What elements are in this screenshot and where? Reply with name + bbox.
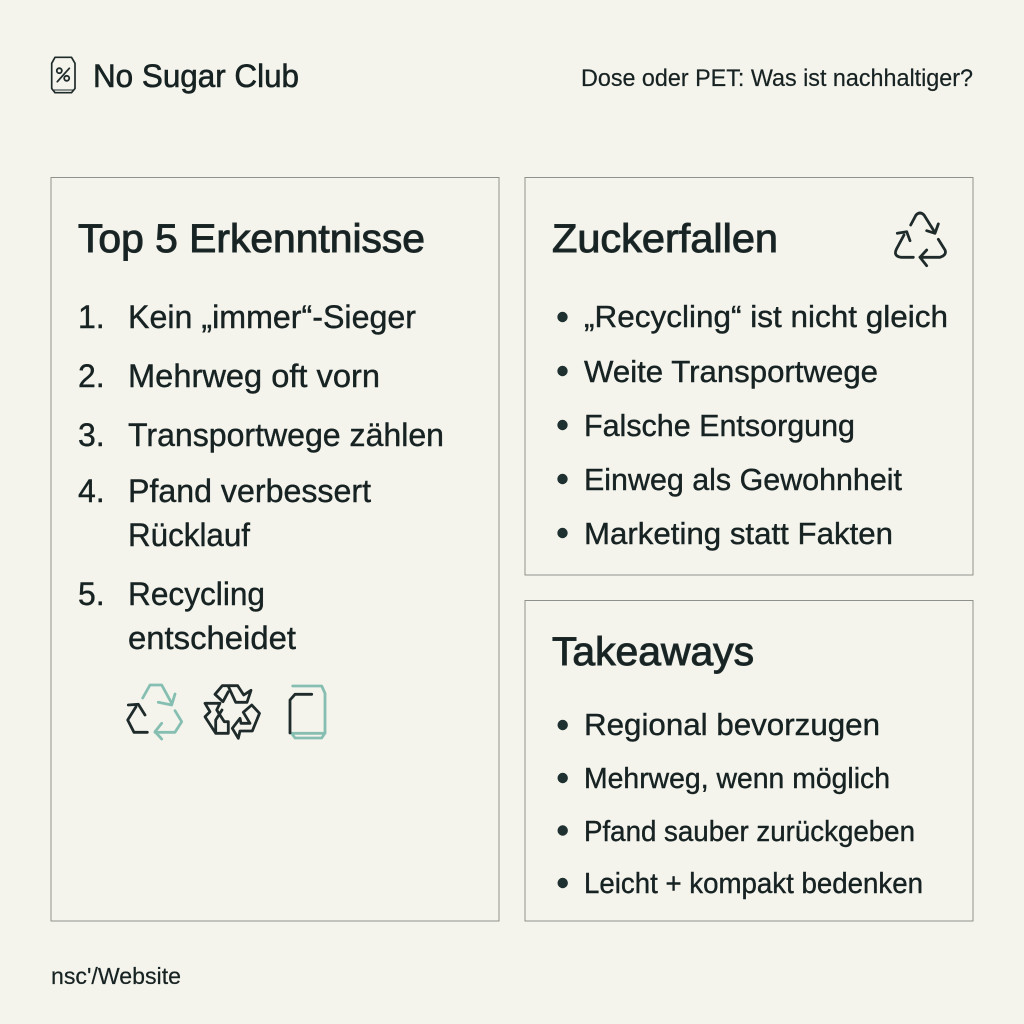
bullet list: „Recycling“ ist nicht gleich [584,299,948,334]
numbered list: 4. [78,473,105,509]
icon: beverage can [290,686,325,738]
header [52,57,973,94]
bullet list: Mehrweg, wenn möglich [584,763,890,795]
numbered list: Transportwege zählen [128,417,444,453]
bullet list: Falsche Entsorgung [584,408,855,443]
numbered list: Mehrweg oft vorn [128,358,380,394]
icon: two-tone recycling arrows [128,685,182,739]
bullet list: Einweg als Gewohnheit [584,462,902,497]
bullet list [557,299,948,551]
panel: Zuckerfallen [525,178,973,575]
numbered list: Pfand verbessert [128,473,371,509]
icon: recycling arrows [895,213,945,266]
footer: nsc'/Website [51,963,181,989]
numbered list: entscheidet [128,620,296,656]
numbered list: 1. [78,299,105,335]
bullet list: Pfand sauber zurückgeben [584,816,915,848]
numbered list: Recycling [128,576,265,612]
numbered list [78,299,444,656]
icon: can with percent sign [52,57,75,93]
bullet list: Regional bevorzugen [584,707,880,742]
bullet list: Marketing statt Fakten [584,516,893,551]
bullet list [558,707,923,900]
numbered list: Rücklauf [128,517,250,553]
heading: Takeaways: Takeaways [552,630,754,674]
numbered list: 3. [78,417,105,453]
brand name: No Sugar Club [93,58,299,94]
bullet list: Leicht + kompakt bedenken [584,868,923,900]
panel: Takeaways [525,600,973,921]
panel: Top 5 Erkenntnisse [51,178,499,921]
numbered list: 2. [78,358,105,394]
numbered list: 5. [78,576,105,612]
icon: dark recycling symbol [205,686,260,738]
bullet list: Weite Transportwege [584,354,878,389]
heading: Top 5 Erkenntnisse: Top 5 Erkenntnisse [78,217,425,261]
header subtitle: Dose oder PET: Was ist nachhaltiger? [581,65,973,92]
heading: Zuckerfallen: Zuckerfallen [552,217,778,261]
numbered list: Kein „immer“-Sieger [128,299,416,335]
